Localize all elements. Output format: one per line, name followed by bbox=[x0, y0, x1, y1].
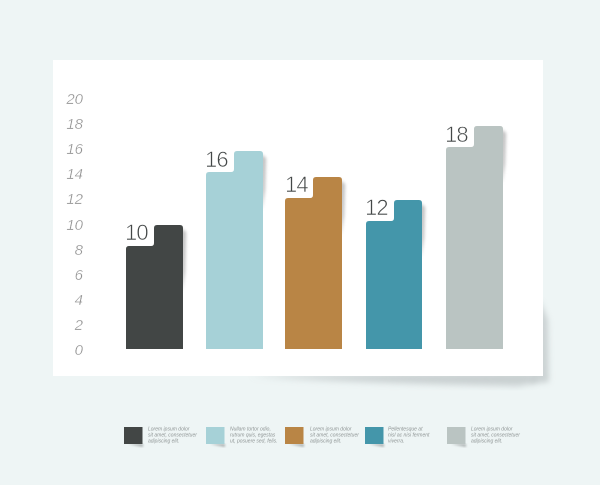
bar 2: value 16 bbox=[205, 147, 266, 349]
legend item 5: sit amet, consectetuer bbox=[471, 432, 520, 438]
bar 3: value 14 bbox=[285, 172, 345, 349]
legend item 2: rutrum quis, egestas bbox=[230, 432, 276, 438]
bar 3: value 14: 14 bbox=[285, 172, 308, 197]
y axis labels: 2 bbox=[74, 317, 84, 334]
y axis labels: 18 bbox=[66, 116, 84, 133]
legend item 4: viverra. bbox=[388, 438, 404, 444]
bar 4: value 12: 12 bbox=[365, 195, 388, 220]
bar 5: value 18: 18 bbox=[445, 122, 468, 147]
y axis labels: 8 bbox=[75, 242, 84, 259]
y axis labels bbox=[65, 91, 84, 359]
bar 1: value 10: 10 bbox=[125, 220, 148, 245]
y axis labels: 6 bbox=[75, 267, 84, 284]
y axis labels: 20 bbox=[65, 91, 84, 108]
legend item 3 bbox=[285, 426, 359, 447]
legend item 1: sit amet, consectetuer bbox=[148, 432, 197, 438]
bar 1: value 10 bbox=[125, 220, 186, 349]
legend bbox=[124, 426, 520, 447]
legend item 2 bbox=[206, 426, 278, 447]
legend item 1: Lorem ipsum dolor bbox=[148, 426, 190, 432]
y axis labels: 12 bbox=[66, 191, 84, 208]
legend item 2: ut, posuere sed, felis. bbox=[230, 438, 278, 444]
bar 5: value 18 bbox=[445, 122, 506, 349]
panel: chart card bbox=[53, 60, 549, 386]
card bottom shadow bbox=[250, 372, 535, 386]
legend item 5: adipiscing elit. bbox=[471, 438, 502, 444]
bar 2: value 16: 16 bbox=[205, 147, 228, 172]
legend item 1: adipiscing elit. bbox=[148, 438, 179, 444]
y axis labels: 4 bbox=[75, 292, 83, 309]
y axis labels: 16 bbox=[66, 141, 84, 158]
y axis labels: 10 bbox=[66, 217, 84, 234]
card right shadow bbox=[530, 300, 549, 384]
legend item 3: sit amet, consectetuer bbox=[310, 432, 359, 438]
bar 4: value 12 bbox=[365, 195, 425, 349]
legend item 5 bbox=[447, 426, 520, 447]
legend item 1 bbox=[124, 426, 197, 447]
y axis labels: 0 bbox=[75, 342, 84, 359]
legend item 3: adipiscing elit. bbox=[310, 438, 341, 444]
legend item 2: Nullam tortor odio, bbox=[230, 426, 271, 432]
legend item 4 bbox=[365, 426, 430, 447]
legend item 5: Lorem ipsum dolor bbox=[471, 426, 513, 432]
y axis labels: 14 bbox=[66, 166, 83, 183]
legend item 3: Lorem ipsum dolor bbox=[310, 426, 352, 432]
legend item 4: Pellentesque at bbox=[388, 426, 423, 432]
legend item 4: nisl ac nisi ferment bbox=[388, 432, 430, 438]
